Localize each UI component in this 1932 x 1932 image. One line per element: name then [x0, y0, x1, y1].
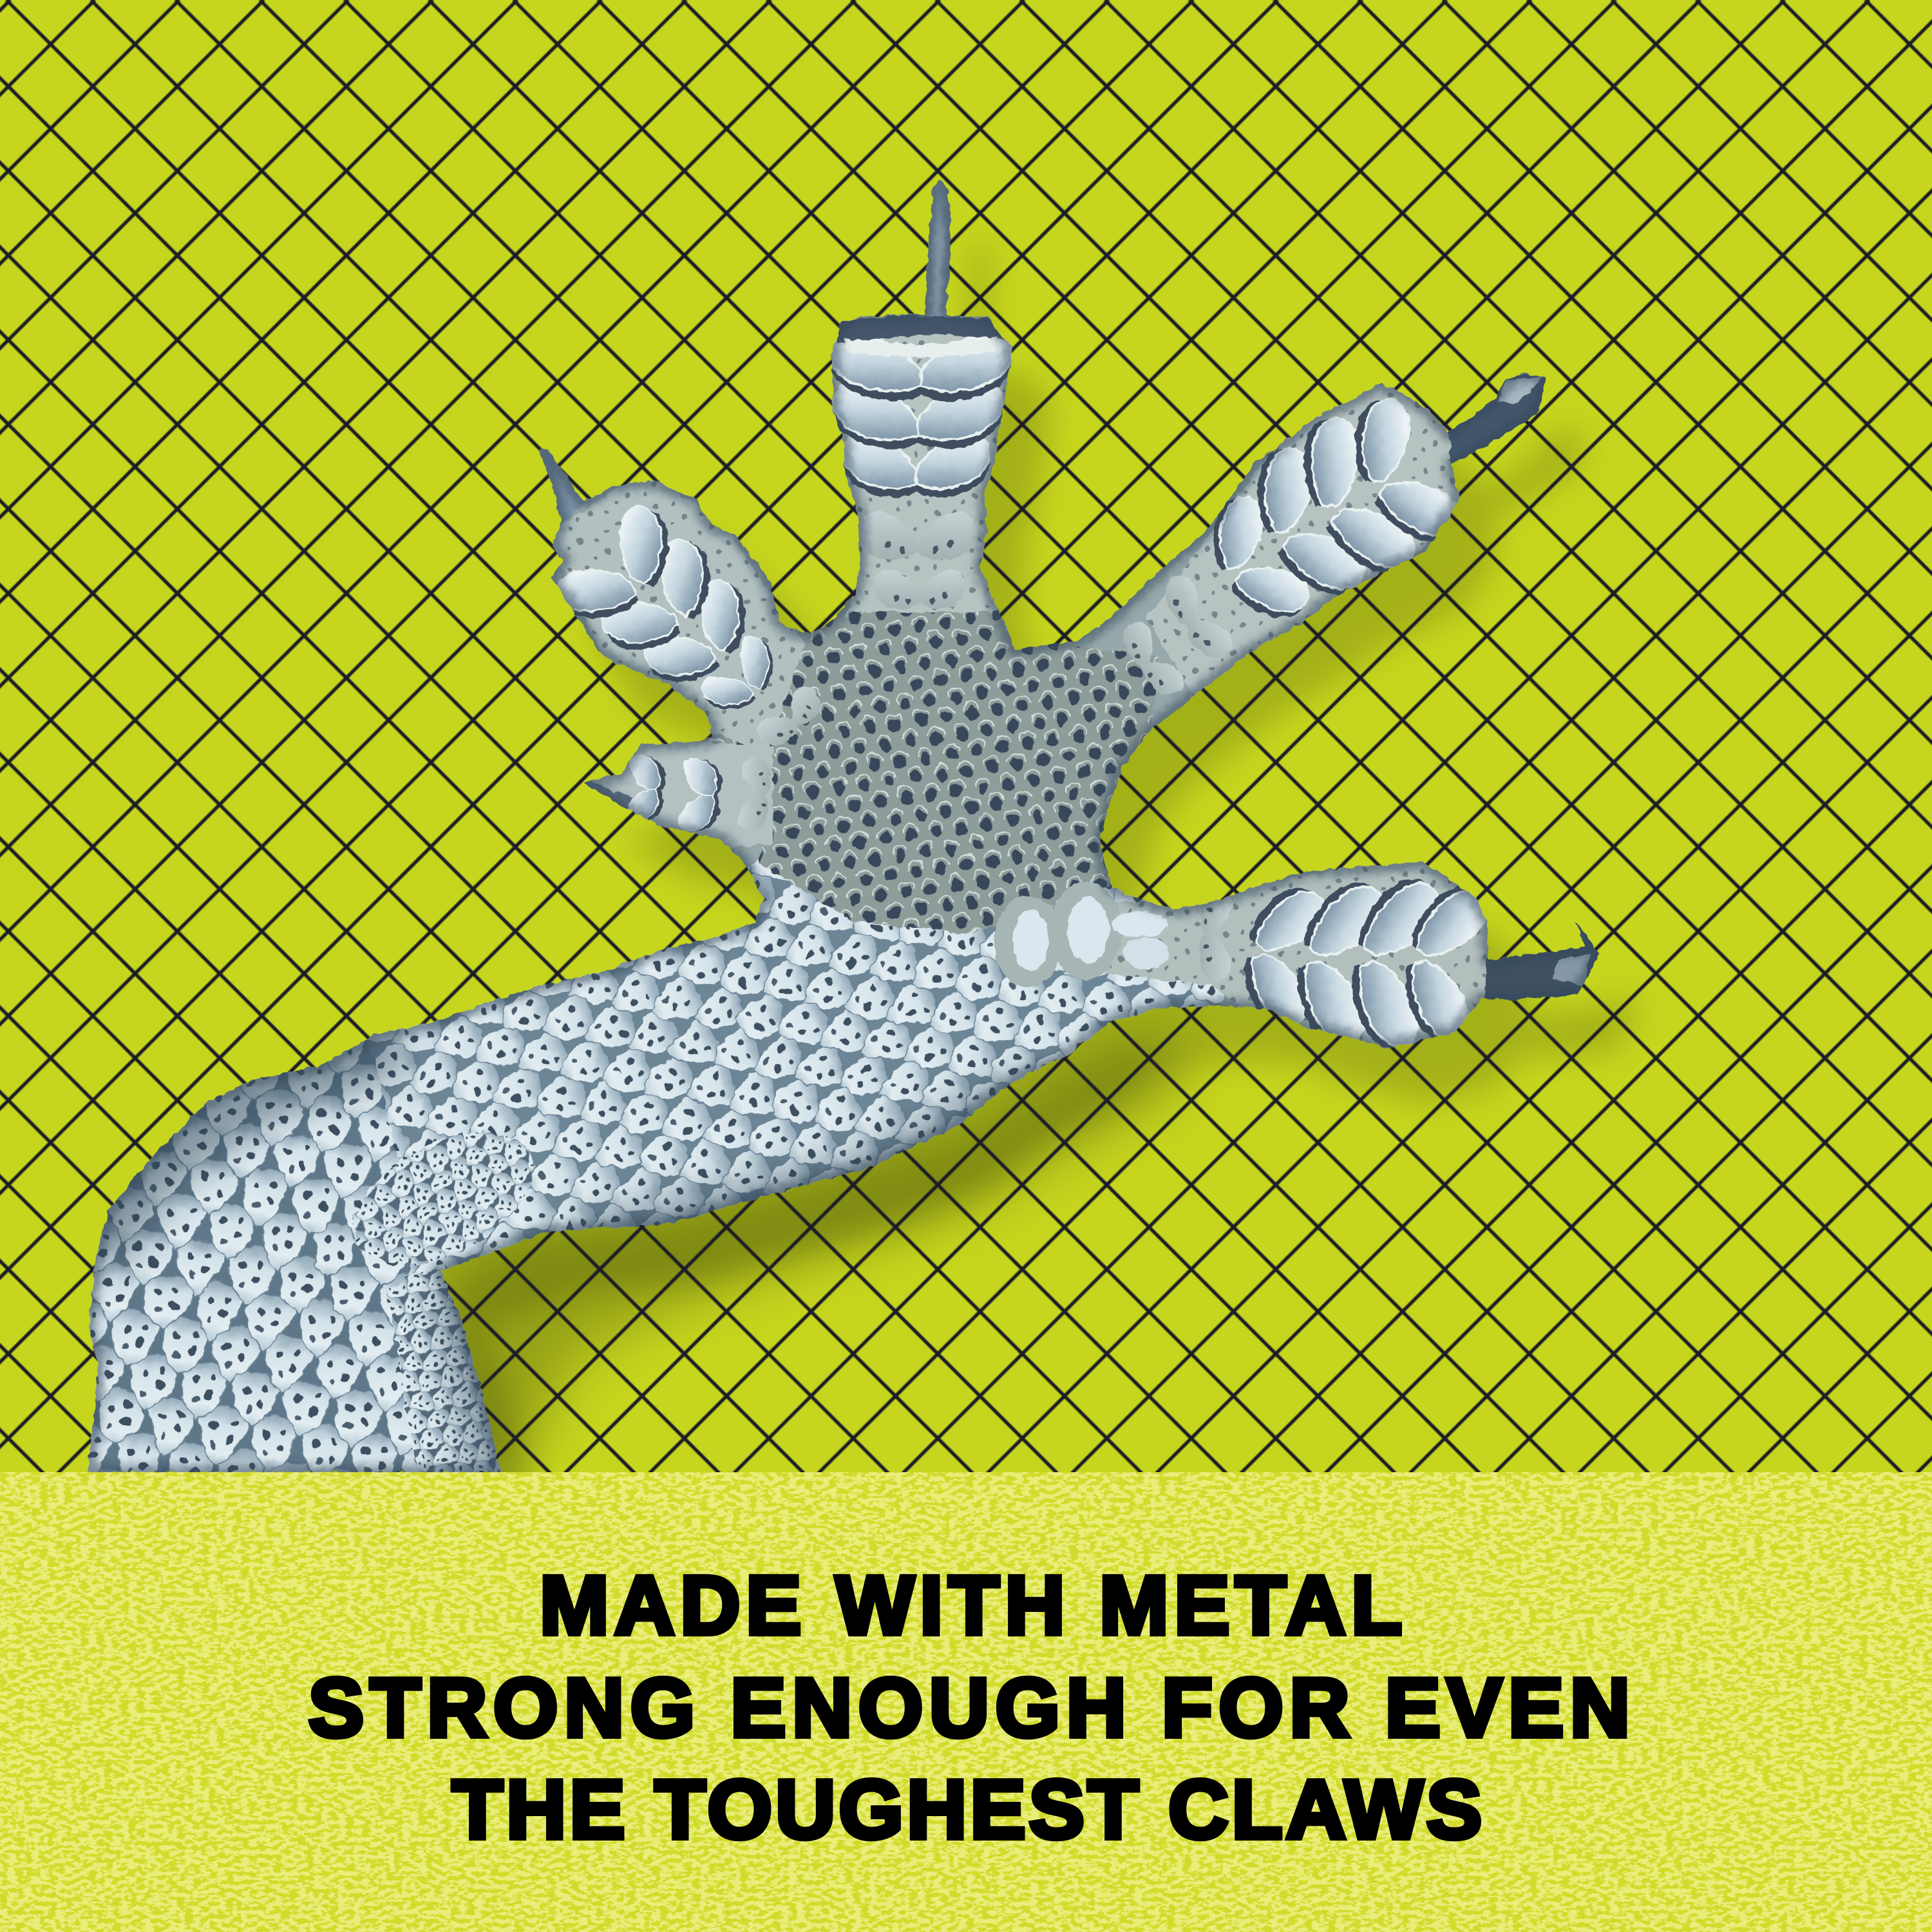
middle toe lamellae [830, 316, 1012, 609]
cast shadow of the gecko leg [128, 236, 1640, 1529]
inner leg edge small scales [386, 1262, 509, 1481]
pale pads at the base of the right toe [994, 882, 1170, 988]
upper-left toe lamellae [540, 488, 828, 753]
claws [538, 174, 1604, 1002]
digit bases [547, 309, 1494, 1056]
metal mesh grid [0, 0, 1932, 1546]
upper leg scales [64, 857, 1224, 1481]
gecko leg and foot [64, 161, 1642, 1481]
caption text: STRONG ENOUGH FOR EVEN [308, 1662, 1630, 1754]
caption text: MADE WITH METAL [540, 1559, 1402, 1652]
dark edge shading [88, 180, 1600, 1472]
background: lime green wall [0, 0, 1932, 1472]
caption text: THE TOUGHEST CLAWS [452, 1763, 1482, 1856]
palm pitted skin [683, 592, 1159, 934]
forearm scales [361, 857, 1224, 1301]
inner elbow small scales [334, 1104, 555, 1291]
bottom caption panel: textured yellow [0, 1472, 1932, 1932]
upper-right toe lamellae [1115, 377, 1477, 703]
dark shading on outer leg and lower forearm [97, 1043, 1030, 1475]
caption text [308, 1559, 1630, 1856]
thumb pads [625, 755, 772, 833]
right toe lamellae [1198, 857, 1498, 1066]
